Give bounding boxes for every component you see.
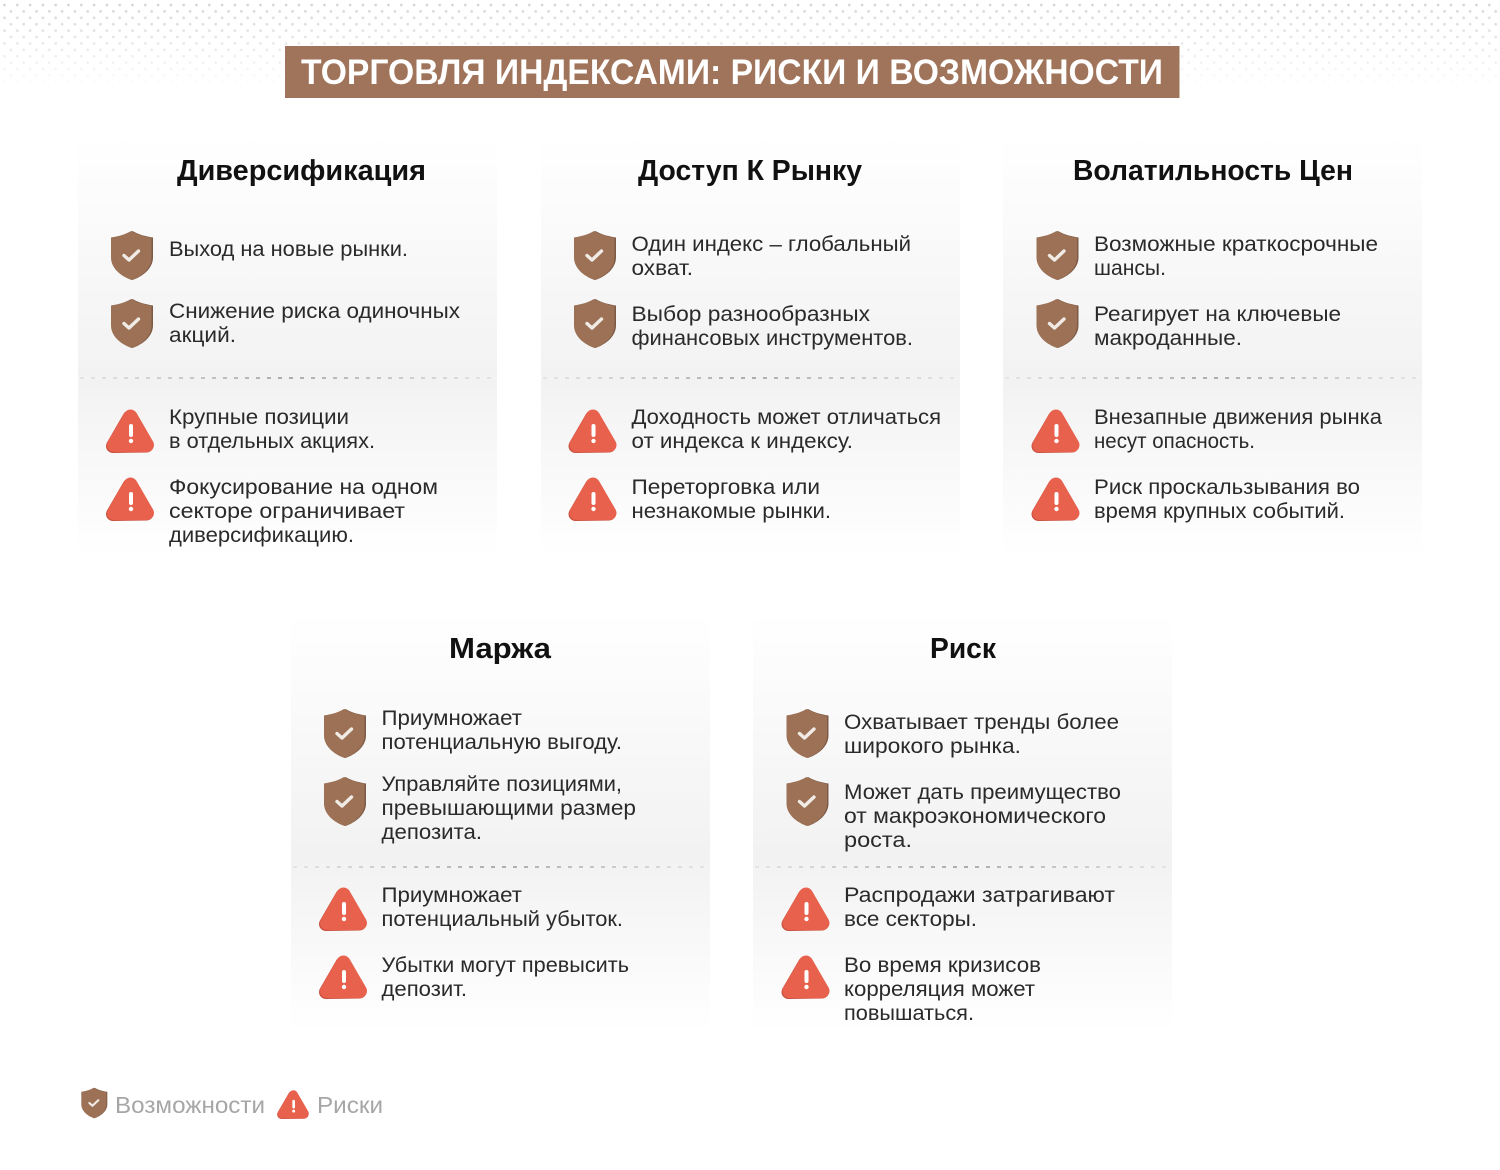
risk: single sector: Фокусирование на одном [169,476,438,499]
risk: losses exceed deposit: Убытки могут превысить [382,954,629,977]
opportunity: single stock risk: акций. [169,324,236,347]
risk: single sector [113,476,438,547]
opportunity: macro growth: роста. [844,829,912,852]
opportunity: new markets [111,231,408,280]
opportunity: broad trends: широкого рынка. [844,735,1021,758]
legend item: opportunities [81,1088,265,1118]
risk: single sector: диверсификацию. [169,524,354,547]
risk: losses exceed deposit: депозит. [382,978,467,1001]
opportunity: profit multiplier: Приумножает [382,707,522,730]
risk: loss multiplier [326,884,623,931]
opportunity: broad trends: Охватывает тренды более [844,711,1119,734]
title: ТОРГОВЛЯ ИНДЕКСАМИ: РИСКИ И ВОЗМОЖНОСТИ [301,53,1163,92]
risk: slippage: время крупных событий. [1094,500,1345,523]
opportunity: single stock risk: Снижение риска одиночных [169,300,461,323]
risk: correlation: Во время кризисов [844,954,1041,977]
risk: overtrading [576,476,831,523]
background dot pattern [0,0,1500,90]
risk: large positions: Крупные позиции [169,406,349,429]
opportunity: larger positions: Управляйте позициями, [382,773,622,796]
risk: losses exceed deposit [326,954,629,1001]
risk: returns differ: Доходность может отличаться [632,406,941,429]
risk: overtrading: незнакомые рынки. [632,500,831,523]
risk: sudden moves: Внезапные движения рынка [1094,406,1382,429]
risk: slippage [1038,476,1360,523]
opportunity: new markets: Выход на новые рынки. [169,238,408,261]
panel: Диверсификация [78,135,497,555]
opportunity: broad trends [786,709,1119,758]
opportunity: larger positions: превышающими размер [382,797,636,820]
opportunity: short-term chances [1036,231,1378,280]
opportunity: short-term chances: Возможные краткосрочные [1094,233,1378,256]
opportunity: macro data: Реагирует на ключевые [1094,303,1341,326]
opportunity: single stock risk [111,299,461,348]
risk: overtrading: Переторговка или [632,476,820,499]
risk: loss multiplier: Приумножает [382,884,522,907]
legend [81,1088,383,1118]
risk: large positions [113,406,375,453]
legend item: risks: Риски [317,1092,383,1118]
risk: selloffs [788,884,1115,931]
opportunity: profit multiplier: потенциальную выгоду. [382,731,622,754]
opportunity: larger positions [324,773,636,844]
opportunity: instruments [574,299,913,350]
heading: Диверсификация: Диверсификация [177,155,426,187]
risk: single sector: секторе ограничивает [169,500,405,523]
opportunity: instruments: Выбор разнообразных [632,303,871,326]
risk: correlation: корреляция может [844,978,1035,1001]
legend item: risks [282,1092,383,1118]
opportunity: global reach: Один индекс – глобальный [632,233,911,256]
opportunity: larger positions: депозита. [382,821,482,844]
risk: large positions: в отдельных акциях. [169,430,375,453]
heading: Риск: Риск [930,633,996,665]
risk: selloffs: Распродажи затрагивают [844,884,1115,907]
heading: Маржа: Маржа [449,633,552,665]
opportunity: macro growth [786,777,1121,852]
risk: correlation [788,954,1041,1025]
legend item: opportunities: Возможности [115,1092,265,1118]
risk: slippage: Риск проскальзывания во [1094,476,1360,499]
panel: Маржа [291,612,710,1032]
risk: sudden moves: несут опасность. [1094,430,1255,453]
risk: returns differ [576,406,941,453]
risk: correlation: повышаться. [844,1002,974,1025]
opportunity: macro data [1036,299,1341,350]
opportunity: macro growth: от макроэкономического [844,805,1106,828]
opportunity: macro growth: Может дать преимущество [844,781,1121,804]
panel: Волатильность цен [1003,135,1422,555]
opportunity: short-term chances: шансы. [1094,257,1166,280]
risk: selloffs: все секторы. [844,908,977,931]
opportunity: macro data: макроданные. [1094,327,1242,350]
heading: Доступ К Рынку: Доступ К Рынку [638,155,862,187]
opportunity: global reach [574,231,911,280]
risk: loss multiplier: потенциальный убыток. [382,908,623,931]
opportunity: instruments: финансовых инструментов. [632,327,913,350]
heading: Волатильность Цен: Волатильность Цен [1073,155,1353,187]
panel: Риск [753,612,1172,1032]
risk: returns differ: от индекса к индексу. [632,430,853,453]
panel: Доступ к рынку [541,135,960,555]
opportunity: global reach: охват. [632,257,693,280]
risk: sudden moves [1038,406,1382,453]
opportunity: profit multiplier [324,707,622,758]
